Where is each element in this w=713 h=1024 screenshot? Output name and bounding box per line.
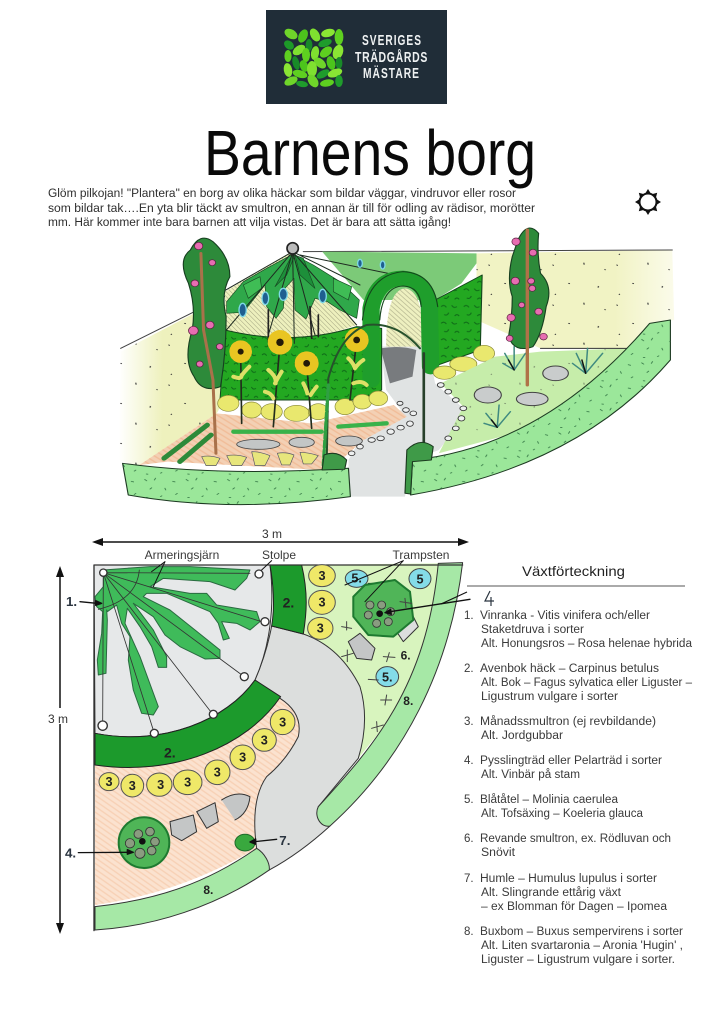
item 6: Revande smultron, ex. Rödluvan och [480,833,671,845]
sunflowers [233,332,367,428]
item 2: 2. [464,663,474,675]
title: Barnens borg [204,117,536,189]
plan: strawberries labelled 3: 3 [184,776,191,790]
path edge pebbles [437,383,467,441]
plan: hedge lower: 2. [164,744,176,760]
item 5: 5. [464,794,474,806]
right bed [439,348,627,453]
tent floor [225,252,357,339]
item 3: Månadssmultron (ej revbildande) [480,716,656,728]
garden plan [65,561,470,931]
plan: blue grasses labelled 5: 5. [382,670,393,684]
vine canopy [220,243,420,343]
stones in bed [237,436,362,449]
plan: blue grasses labelled 5 [345,569,431,687]
plan: strawberries labelled 3: 3 [105,775,113,789]
dimension arrow: height [46,566,72,934]
plan annotations: Trampsten [393,548,449,562]
plan: strawberries labelled 3: 3 [317,622,324,636]
left pillar tree [183,238,230,453]
dimension arrow: width: 3 m [262,527,282,541]
plant list heading: Växtförteckning [522,563,625,579]
plan: number labels: 8. [203,883,213,897]
item 2: Avenbok häck – Carpinus betulus [480,663,659,675]
item 7 [464,873,668,913]
item 6: 6. [464,833,474,845]
icon: sun [635,189,661,215]
plan: number labels: 8. [403,694,413,708]
logo wordmark: SVERIGES [362,32,422,49]
plan: tree lower (4) [119,817,169,868]
item 1 [464,610,693,650]
logo wordmark: MÄSTARE [363,65,420,82]
plan: posts [98,569,269,737]
lawn right [121,250,674,348]
plan: strawberries labelled 3: 3 [239,751,246,765]
item 8 [464,926,683,966]
dimension arrow: height: 3 m [48,712,68,726]
box hedge right [411,320,670,495]
right wall hedge [433,275,482,367]
plan: strawberries labelled 3: 3 [318,569,325,583]
logo wordmark: TRÄDGÅRDS [355,49,428,66]
plan: strawberries labelled 3: 3 [157,778,164,792]
soil bed [140,405,407,470]
garden perspective sketch [119,228,674,505]
lettuces [202,452,318,466]
item 8: Alt. Liten svartaronia – Aronia 'Hugin' , [481,940,683,952]
item 2: Ligustrum vulgare i sorter [481,691,618,703]
plan: hedge lower [95,680,281,767]
stepping stones [474,366,568,406]
intro text: som bildar tak….En yta blir täckt av smultron, en annan är till för odling av rädisor, morötter [48,201,535,215]
item 3: 3. [464,716,474,728]
item 2: Alt. Bok – Fagus sylvatica eller Liguster – [481,677,693,689]
path [348,345,461,497]
sketch foreground layer [123,228,670,505]
plan annotations: Armeringsjärn [145,548,219,562]
intro text: Glöm pilkojan! "Plantera" en borg av olika häckar som bildar väggar, vindruvor eller rosor [48,186,516,200]
plan: number labels [65,594,413,897]
plan: strawberry crosses [342,598,412,732]
item 7: – ex Blomman för Dagen – Ipomea [481,901,668,913]
grass tufts [484,347,603,427]
item 7: Humle – Humulus lupulus i sorter [480,873,657,885]
item 2 [464,663,693,703]
plan: box hedge upper [317,563,463,826]
item 4: Pysslingträd eller Pelarträd i sorter [480,755,662,767]
strawberry row [218,391,388,421]
right pillar tree [506,228,549,385]
left vegetable row [164,425,211,462]
intro text [48,186,535,229]
plan annotations: Stolpe [262,548,296,562]
plan: outline [94,565,463,931]
item 6: Snövit [481,847,516,859]
item 5: Blåtåtel – Molinia caerulea [480,794,619,806]
vegetable rows [233,423,387,432]
item 7: 7. [464,873,474,885]
item 4 [464,755,662,781]
circular hedge [220,327,382,400]
plan: strawberries labelled 3: 3 [214,766,221,780]
plan: soil bed [95,698,299,905]
lawn left [119,313,228,467]
item 8: Buxbom – Buxus sempervirens i sorter [480,926,683,938]
plan: vines [95,567,260,715]
item 3 [464,716,656,742]
item 1: Alt. Honungsros – Rosa helenae hybrida [481,638,693,650]
plan: gravel path [255,626,365,870]
dark gravel [380,347,416,383]
item 1: Vinranka - Vitis vinifera och/eller [480,610,650,622]
logo wordmark [355,32,428,82]
small arbour arch [327,325,420,465]
arch and right wall [362,272,482,447]
plan: strawberries labelled 3: 3 [279,715,286,729]
plan: hedge upper [270,565,306,634]
plants along hedge [202,325,420,466]
logo [266,10,447,104]
plan: hop plant [235,834,255,851]
item 4: 4. [464,755,474,767]
arch [362,272,438,447]
item 4: Alt. Vinbär på stam [481,769,580,781]
sketch background layer [119,250,674,497]
plan: box hedge lower [95,848,269,930]
grapes [239,259,385,317]
item 5: Alt. Tofsäxing – Koeleria glauca [481,808,644,820]
plan: number labels: 4. [65,845,76,860]
plan: blue grasses labelled 5: 5. [351,572,362,586]
logo leaves [282,27,345,89]
item 6 [464,833,671,859]
handwritten number four [441,591,494,606]
plan: pointer arrows [78,561,470,854]
plant list [464,610,693,966]
pebbles [348,401,417,456]
plan: number labels: 7. [279,833,290,848]
item 8: 8. [464,926,474,938]
plan: strawberries labelled 3: 3 [129,779,136,793]
item 5 [464,794,644,820]
plan: strawberry lawn [302,563,438,758]
plan: arbour floor [94,565,272,737]
hop bushes [322,442,433,494]
intro text: mm. Här kommer inte bara barnen att vilja vistas. Det är bara att sätta igång! [48,215,451,229]
item 7: Alt. Slingrande ettårig växt [481,887,622,899]
plan: strawberries labelled 3: 3 [318,596,325,610]
plan: tree upper (4) [353,580,413,637]
item 3: Alt. Jordgubbar [481,730,563,742]
box hedge left [123,463,350,505]
plan: stepping stones [170,583,418,841]
item 1: Staketdruva i sorter [481,624,584,636]
plan: number labels: 6. [401,648,411,662]
plan: number labels: 1. [66,594,77,609]
back hedge [322,252,476,300]
plan: hedge upper: 2. [283,594,294,610]
right strawberry hedge [433,345,495,379]
item 1: 1. [464,610,474,622]
plan: strawberries labelled 3: 3 [261,733,268,747]
plan annotations [145,548,449,562]
plan: strawberries labelled 3 [99,565,335,797]
item 8: Liguster – Ligustrum vulgare i sorter. [481,954,675,966]
plan: reinforcing bars [98,570,262,733]
dimension arrow: width [92,527,469,546]
arbour with hedge and vines [220,243,420,400]
plan: blue grasses labelled 5: 5 [416,572,423,586]
